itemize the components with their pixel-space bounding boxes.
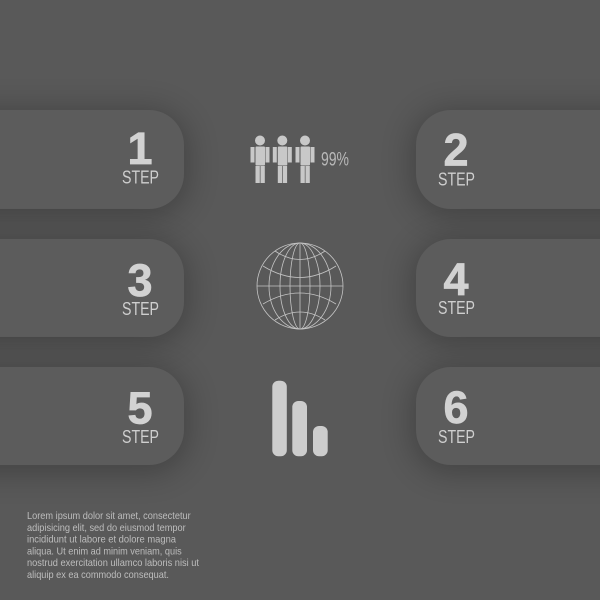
panel: step 3 — [0, 239, 184, 337]
step 6 label: 6 — [443, 382, 469, 433]
step 4 label: STEP — [438, 297, 475, 318]
body text: aliqua. Ut enim ad minim veniam, quis — [27, 545, 182, 557]
step 1 label: 1 — [127, 123, 153, 174]
panel: step 2 — [416, 110, 600, 209]
step 2 label — [438, 124, 475, 190]
icon: three people — [250, 136, 314, 183]
body text: incididunt ut labore et dolore magna — [27, 534, 176, 546]
step 3 label: STEP — [122, 298, 159, 319]
panel: step 1 — [0, 110, 184, 209]
panel: step 5 — [0, 367, 184, 465]
step 1 label: STEP — [122, 166, 159, 188]
step 4 label — [438, 254, 475, 318]
percentage label: 99% — [321, 150, 349, 170]
step 3 label: 3 — [127, 255, 153, 306]
body text: aliquip ex ea commodo consequat. — [27, 569, 169, 581]
step 5 label: 5 — [127, 382, 153, 434]
body text: adipisicing elit, sed do eiusmod tempor — [27, 522, 186, 534]
icon: bar chart — [272, 381, 328, 456]
step 5 label: STEP — [122, 426, 159, 447]
step 6 label — [438, 382, 475, 447]
step 1 label — [122, 123, 159, 188]
step 3 label — [122, 255, 159, 319]
panel: step 4 — [416, 239, 600, 337]
step 6 label: STEP — [438, 426, 475, 447]
body text: nostrud exercitation ullamco laboris nisi ut — [27, 557, 199, 569]
step 4 label: 4 — [443, 254, 469, 305]
step 2 label: 2 — [443, 124, 469, 176]
body text: Lorem ipsum dolor sit amet, consectetur — [27, 510, 191, 522]
icon: globe — [257, 243, 343, 329]
step 2 label: STEP — [438, 168, 475, 190]
step 5 label — [122, 382, 159, 447]
panel: step 6 — [416, 367, 600, 465]
body text — [27, 510, 199, 581]
